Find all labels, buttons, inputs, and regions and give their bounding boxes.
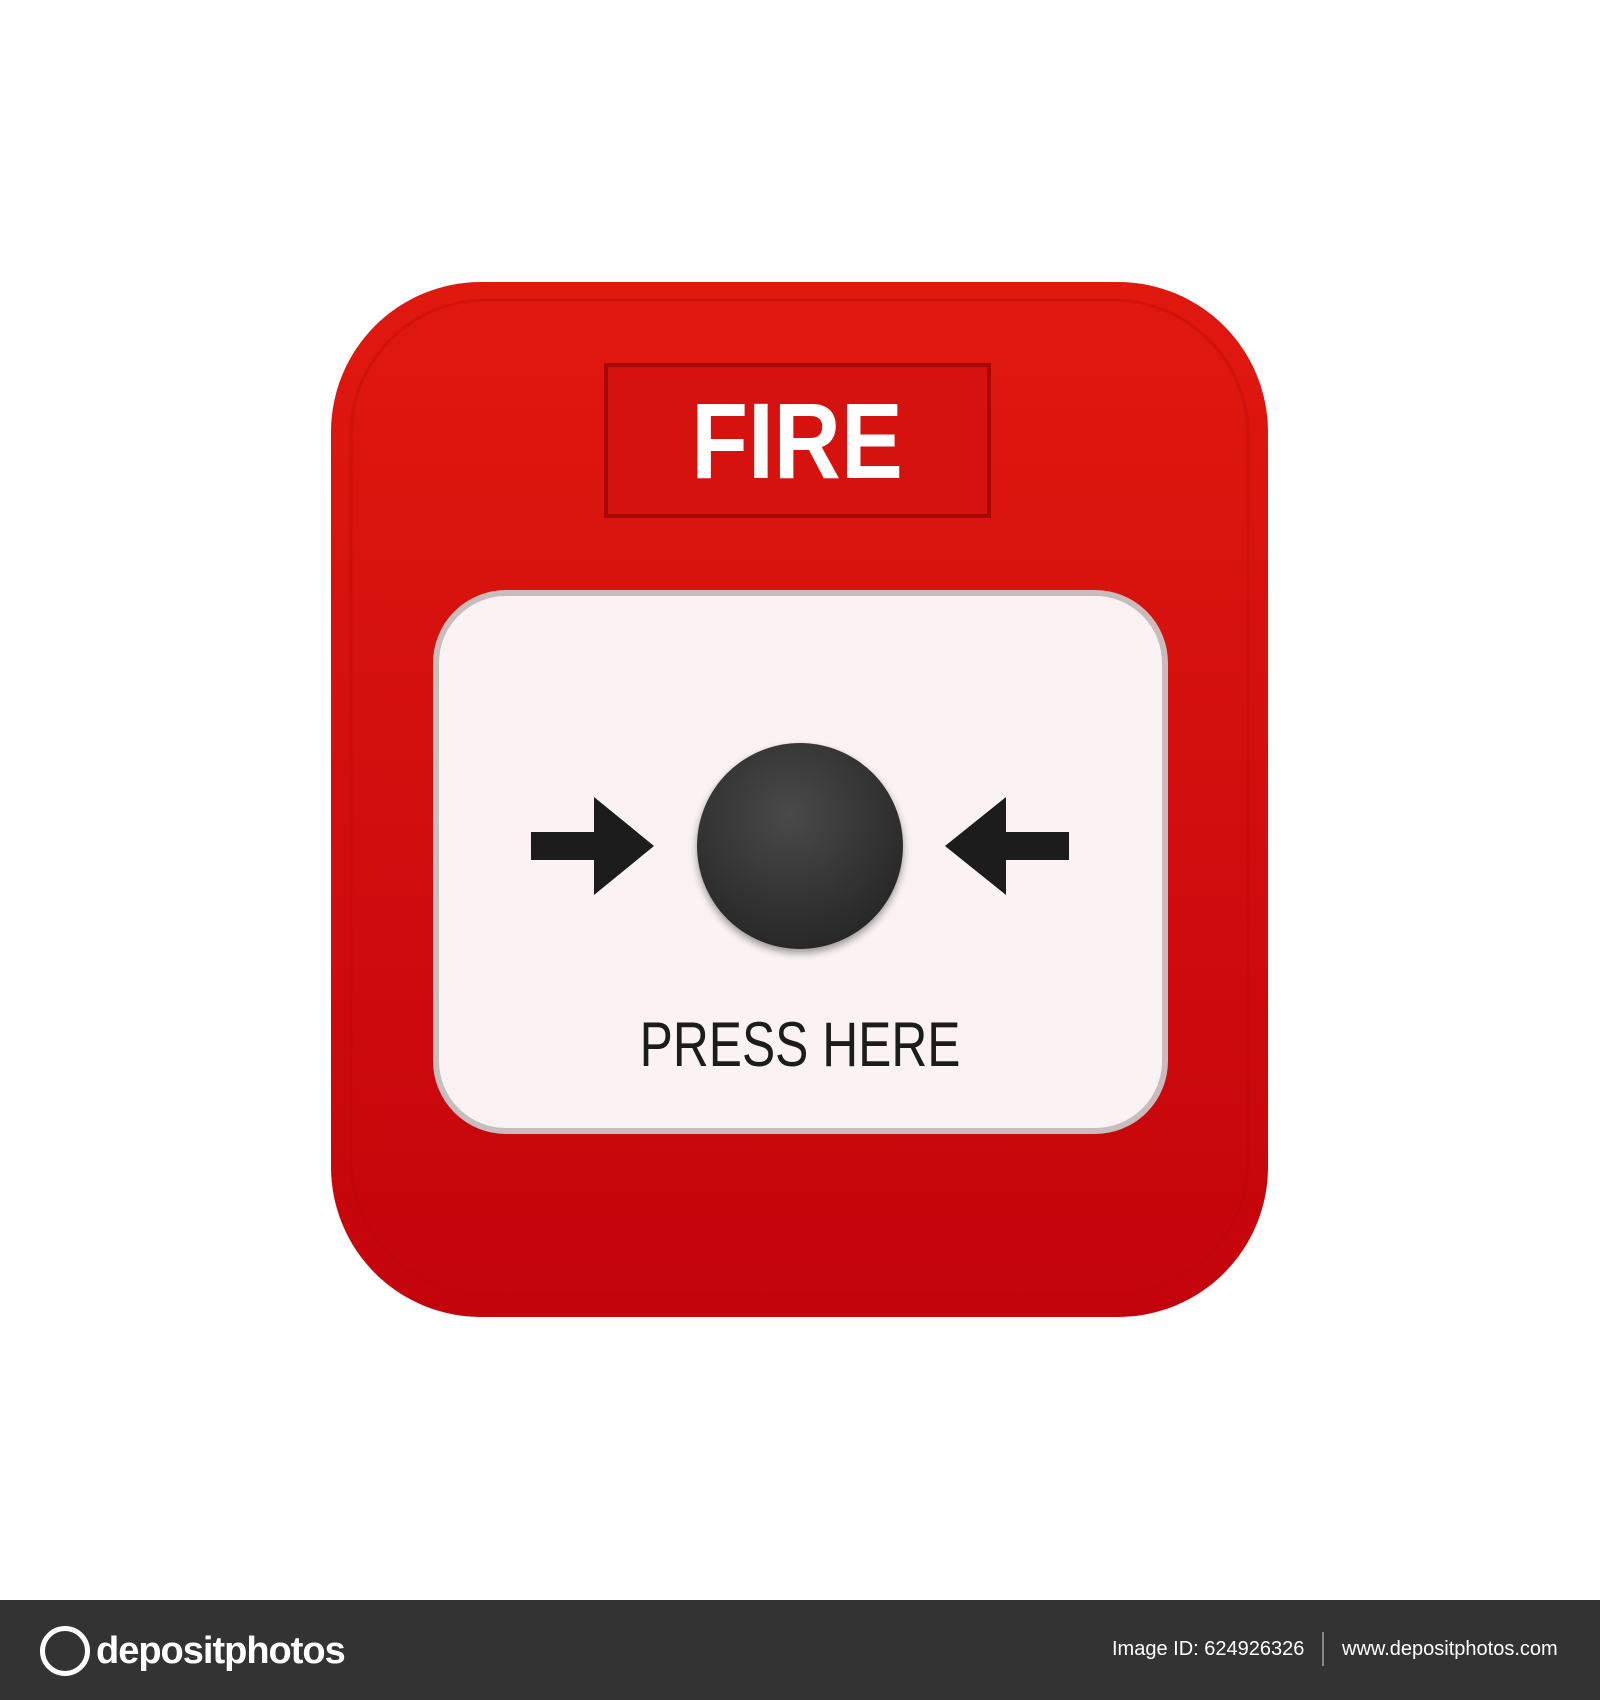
footer url: www.depositphotos.com — [1342, 1638, 1558, 1660]
footer logo: depositphotos — [96, 1630, 345, 1672]
footer image id: Image ID: 624926326 — [1112, 1638, 1304, 1660]
fire alarm box — [331, 282, 1268, 1317]
icon: left arrow — [531, 797, 654, 895]
icon: right arrow — [945, 797, 1069, 895]
text: PRESS HERE: PRESS HERE — [640, 1010, 961, 1080]
footer bar — [0, 1600, 1600, 1700]
label plate: FIRE: FIRE — [692, 380, 903, 501]
label plate: FIRE — [604, 363, 991, 518]
icon: push button — [697, 743, 903, 949]
footer logo — [40, 1626, 345, 1676]
